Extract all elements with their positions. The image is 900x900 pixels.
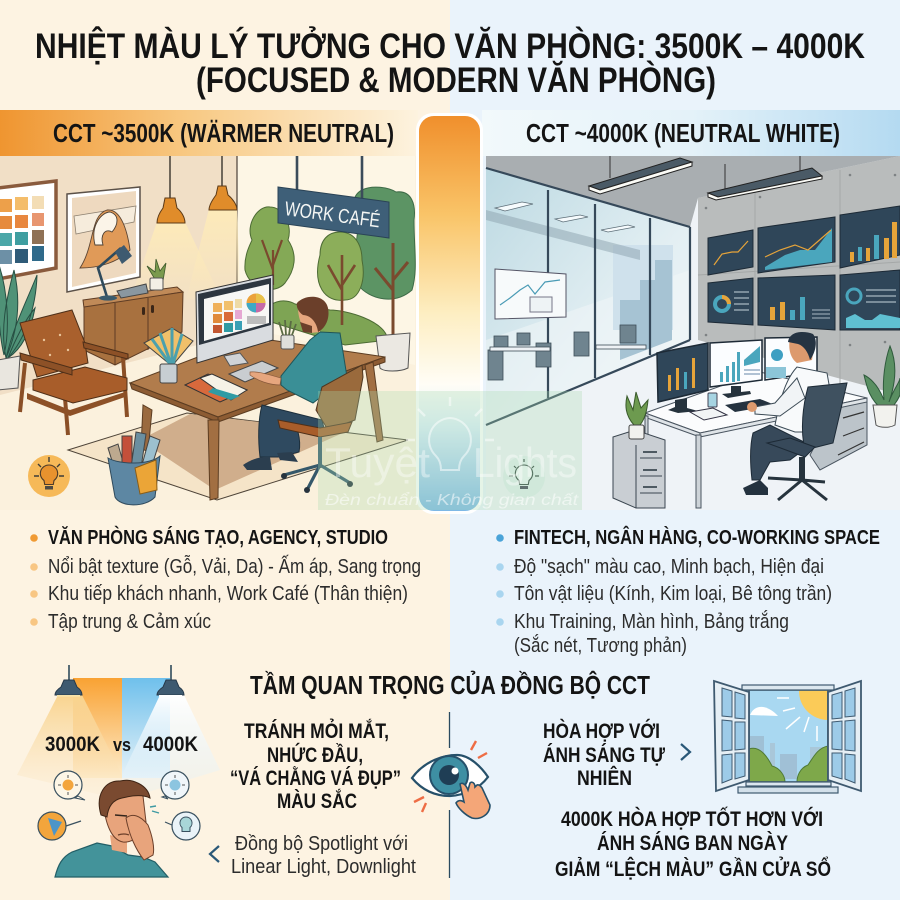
ceiling panel lights behind glass bbox=[495, 202, 635, 232]
linear pendant lights bbox=[589, 156, 822, 200]
desk monitors bbox=[657, 337, 817, 413]
watermark: Tuyet Lights: Đèn chuẩn - Không gian chất bbox=[325, 492, 579, 509]
list: warm applications: Nổi bật texture (Gỗ, Vải, Da) - Ấm áp, Sang trọng bbox=[48, 555, 421, 578]
armchair bbox=[20, 310, 128, 435]
lamp left bbox=[55, 665, 82, 697]
header band: CCT 4000K bbox=[482, 110, 900, 156]
text: avoid eye strain bbox=[230, 718, 401, 813]
icon: cool sun speech bubble bbox=[161, 771, 189, 799]
text: harmony with daylight: NHIÊN bbox=[577, 765, 632, 790]
filing cabinet with plant bbox=[613, 392, 665, 508]
icon: eye with hand bbox=[412, 741, 490, 818]
office chair: warm bbox=[278, 365, 363, 493]
title bbox=[35, 26, 865, 100]
pendant lamp one bbox=[157, 156, 185, 223]
watermark: Tuyet Lights bbox=[318, 391, 582, 510]
worker: creative designer bbox=[243, 297, 347, 470]
center CCT gradient bar bbox=[416, 113, 483, 514]
page background cool half bbox=[450, 0, 900, 900]
watermark: Tuyet Lights: Tuyệt bbox=[325, 439, 430, 486]
worker: analyst bbox=[743, 332, 830, 495]
label: 3000K vs 4000K: 4000K bbox=[143, 733, 198, 756]
arrow: left chevron bbox=[210, 846, 219, 862]
pendant lamp two bbox=[209, 156, 237, 210]
illustration: man with eye strain bbox=[55, 780, 168, 877]
meeting chairs behind glass bbox=[488, 325, 646, 380]
floor plant bbox=[0, 262, 37, 390]
office whiteboard behind glass bbox=[495, 269, 566, 319]
lamp right bbox=[157, 665, 184, 697]
hanging sign: Work Cafe bbox=[278, 156, 389, 238]
pencil cup bbox=[279, 320, 296, 349]
icon: warm lightbulb bbox=[28, 455, 70, 497]
icon: neutral lightbulb bbox=[503, 456, 545, 498]
header band: CCT 3500K: CCT ~3500K (WÄRMER NEUTRAL) bbox=[53, 120, 394, 148]
illustration: open window bbox=[713, 680, 862, 794]
watermark: Tuyet Lights: Lights bbox=[473, 439, 577, 486]
list: neutral applications bbox=[496, 525, 880, 657]
illustration: neutral white fintech office bbox=[486, 156, 900, 510]
text: 4000K daylight benefit bbox=[555, 805, 831, 881]
bucket of material rolls bbox=[108, 432, 160, 505]
page background warm half bbox=[0, 0, 450, 900]
left shutter bbox=[714, 681, 749, 791]
right shutter bbox=[828, 681, 861, 791]
trees seen through window bbox=[245, 187, 415, 371]
list: neutral applications: (Sắc nét, Tương phản) bbox=[514, 634, 687, 657]
icon: color badge bbox=[38, 812, 81, 840]
list: warm applications: Khu tiếp khách nhanh, Work Café (Thân thiện) bbox=[48, 583, 408, 605]
label: 3000K vs 4000K: vs bbox=[113, 735, 131, 755]
glass partition frames bbox=[486, 168, 690, 425]
text: harmony with daylight: ÁNH SÁNG TỰ bbox=[543, 742, 665, 767]
wall plant bbox=[864, 346, 900, 427]
list: neutral applications: Độ "sạch" màu cao, Minh bạch, Hiện đại bbox=[514, 556, 824, 578]
colour swatch fan in cup bbox=[144, 328, 193, 383]
computer monitor with palette bbox=[196, 275, 273, 366]
list: warm applications: VĂN PHÒNG SÁNG TẠO, AGENCY, STUDIO bbox=[48, 525, 388, 549]
text: 4000K daylight benefit: ÁNH SÁNG BAN NGÀY bbox=[597, 830, 788, 855]
list: warm applications bbox=[30, 525, 421, 633]
text: avoid eye strain: MÀU SẮC bbox=[277, 788, 357, 813]
text: avoid eye strain: “VÁ CHẰNG VÁ ĐỤP” bbox=[230, 765, 401, 790]
wooden desk bbox=[130, 337, 385, 500]
icon: bulb badge bbox=[165, 812, 200, 840]
label: 3000K vs 4000K: 3000K bbox=[45, 733, 100, 756]
keyboard bbox=[229, 361, 278, 382]
text: avoid eye strain: TRÁNH MỎI MẮT, bbox=[244, 718, 389, 743]
wall dashboards bbox=[708, 206, 900, 330]
text: harmony with daylight: HÒA HỢP VỚI bbox=[543, 718, 660, 743]
list: neutral applications: Khu Training, Màn hình, Bảng trắng bbox=[514, 610, 789, 633]
label: 3000K vs 4000K bbox=[45, 733, 198, 756]
text: linear light: Linear Light, Downlight bbox=[231, 856, 416, 878]
sideboard cabinet bbox=[83, 284, 183, 365]
text: sync spotlight: Đồng bộ Spotlight với bbox=[235, 833, 408, 855]
hanging sign: Work Cafe: WORK CAFÉ bbox=[283, 197, 382, 232]
small potted plant bbox=[147, 259, 166, 290]
colour cards on desk bbox=[185, 374, 247, 402]
heading: CCT sync importance: TẦM QUAN TRỌNG CỦA ĐỒNG BỘ CCT bbox=[250, 670, 650, 700]
drawer cabinet right of desk bbox=[810, 398, 867, 470]
arrow: right chevron bbox=[681, 744, 690, 760]
office chair: dark bbox=[767, 383, 847, 500]
floor rug bbox=[68, 413, 408, 500]
text: harmony with daylight bbox=[543, 718, 665, 790]
illustration: warm work cafe office bbox=[0, 156, 418, 510]
wall art: colour swatch poster bbox=[0, 181, 56, 279]
white desk bbox=[645, 372, 867, 508]
header band: CCT 3500K bbox=[0, 110, 418, 156]
desk lamp bbox=[98, 245, 132, 301]
text: 4000K daylight benefit: GIẢM “LỆCH MÀU” GẦN CỬA SỔ bbox=[555, 856, 831, 881]
illustration: 3000K vs 4000K lamps bbox=[17, 665, 220, 800]
title: (FOCUSED & MODERN VĂN PHÒNG) bbox=[196, 60, 716, 100]
text: 4000K daylight benefit: 4000K HÒA HỢP TỐT HƠN VỚI bbox=[561, 805, 823, 831]
header band: CCT 4000K: CCT ~4000K (NEUTRAL WHITE) bbox=[526, 120, 840, 148]
desk items bbox=[690, 393, 775, 420]
list: warm applications: Tập trung & Cảm xúc bbox=[48, 611, 211, 633]
icon: sun speech bubble bbox=[54, 771, 85, 800]
wall art: abstract print bbox=[67, 187, 140, 292]
text: avoid eye strain: NHỨC ĐẦU, bbox=[267, 742, 363, 767]
list: neutral applications: Tôn vật liệu (Kính, Kim loại, Bê tông trần) bbox=[514, 583, 832, 605]
